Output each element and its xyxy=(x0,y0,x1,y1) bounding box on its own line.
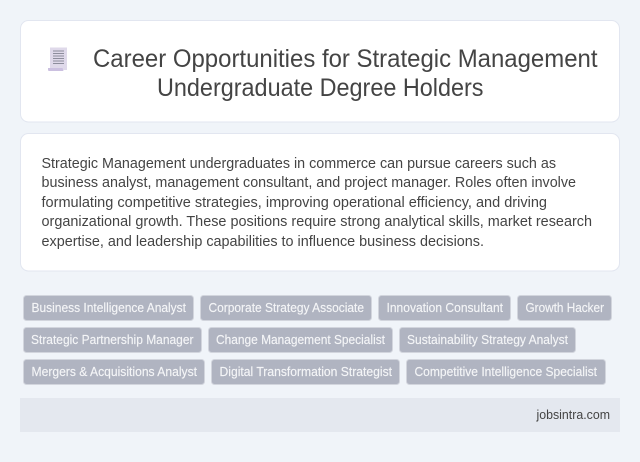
title: Career Opportunities for Strategic Management xyxy=(93,45,598,73)
footer source text: jobsintra.com xyxy=(536,408,610,422)
description text: expertise, and leadership capabilities to influence business decisions. xyxy=(42,233,484,250)
tag: Growth Hacker xyxy=(518,296,612,320)
panel: title header xyxy=(20,20,620,122)
tag: Sustainability Strategy Analyst xyxy=(400,328,576,352)
tag: Mergers & Acquisitions Analyst xyxy=(24,360,204,384)
tag: Business Intelligence Analyst: Business Intelligence Analyst xyxy=(32,301,186,315)
panel: description xyxy=(20,134,620,271)
tag: Strategic Partnership Manager xyxy=(24,328,202,352)
tag: Strategic Partnership Manager: Strategic Partnership Manager xyxy=(31,333,194,347)
title xyxy=(93,45,598,102)
description text: Strategic Management undergraduates in commerce can pursue careers such as xyxy=(42,155,556,172)
tag: Digital Transformation Strategist: Digital Transformation Strategist xyxy=(220,365,392,379)
tag: Innovation Consultant: Innovation Consultant xyxy=(386,301,503,315)
tag: Competitive Intelligence Specialist: Competitive Intelligence Specialist xyxy=(414,365,597,379)
tag list: career roles xyxy=(24,296,612,384)
icon: document scroll xyxy=(48,48,67,71)
footer bar xyxy=(20,398,620,432)
tag: Growth Hacker: Growth Hacker xyxy=(526,301,604,315)
tag: Business Intelligence Analyst xyxy=(24,296,194,320)
tag: Corporate Strategy Associate: Corporate Strategy Associate xyxy=(208,301,364,315)
tag: Innovation Consultant xyxy=(378,296,510,320)
tag: Digital Transformation Strategist xyxy=(212,360,400,384)
description text: organizational growth. These positions require strong analytical skills, market research xyxy=(42,213,592,230)
title: Undergraduate Degree Holders xyxy=(157,74,484,102)
description text: business analyst, management consultant, and project manager. Roles often involve xyxy=(42,174,576,191)
tag: Competitive Intelligence Specialist xyxy=(406,360,606,384)
tag: Corporate Strategy Associate xyxy=(200,296,372,320)
tag: Change Management Specialist xyxy=(208,328,392,352)
tag: Sustainability Strategy Analyst: Sustainability Strategy Analyst xyxy=(407,333,568,347)
tag: Change Management Specialist: Change Management Specialist xyxy=(216,333,385,347)
description text xyxy=(42,155,592,250)
description text: formulating competitive strategies, improving operational efficiency, and driving xyxy=(42,194,547,211)
tag: Mergers & Acquisitions Analyst: Mergers & Acquisitions Analyst xyxy=(32,365,197,379)
